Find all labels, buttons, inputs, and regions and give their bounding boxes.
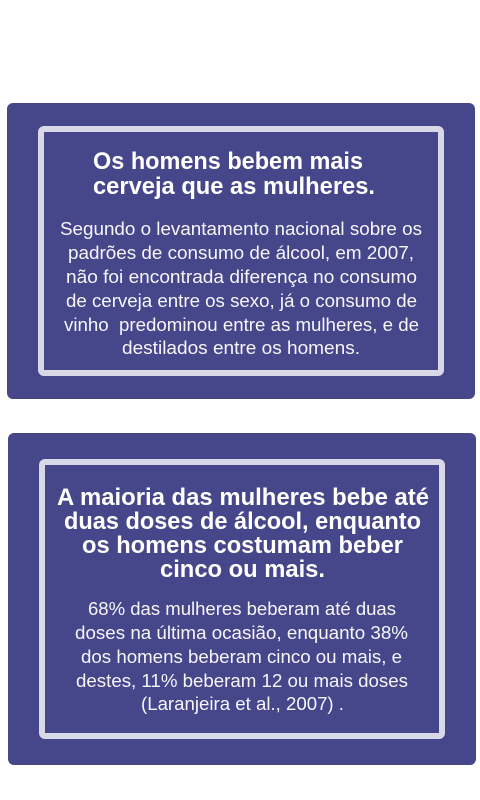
text block: doses statistics	[75, 598, 408, 714]
panel frame	[42, 462, 442, 736]
text block: beer survey	[60, 218, 422, 358]
heading: doses	[57, 484, 429, 583]
text block: beer survey: não foi encontrada diferença no consumo	[66, 266, 417, 287]
panel background	[8, 433, 476, 765]
heading: doses: duas doses de álcool, enquanto	[64, 508, 421, 535]
text block: beer survey: de cerveja entre os sexo, já o consumo de	[66, 290, 417, 311]
heading: beer: cerveja que as mulheres.	[93, 173, 375, 200]
text block: beer survey: padrões de consumo de álcool, em 2007,	[68, 242, 414, 263]
text block: beer survey: vinho predominou entre as mulheres, e de	[64, 314, 419, 335]
panel: number of doses	[8, 433, 476, 765]
heading: doses: cinco ou mais.	[160, 556, 325, 583]
panel: beer consumption	[7, 103, 475, 399]
text block: doses statistics: (Laranjeira et al., 2007) .	[141, 693, 344, 714]
text block: doses statistics: 68% das mulheres beberam até duas	[88, 598, 396, 619]
text block: doses statistics: destes, 11% beberam 12 ou mais doses	[76, 670, 408, 691]
heading: doses: os homens costumam beber	[82, 532, 403, 559]
text block: doses statistics: dos homens beberam cinco ou mais, e	[81, 646, 402, 667]
text block: beer survey: Segundo o levantamento nacional sobre os	[60, 218, 422, 239]
panel frame	[41, 129, 441, 373]
heading: beer: Os homens bebem mais	[93, 148, 363, 175]
heading: doses: A maioria das mulheres bebe até	[57, 484, 429, 511]
heading: beer	[93, 148, 375, 200]
panel background	[7, 103, 475, 399]
text block: beer survey: destilados entre os homens.	[122, 337, 360, 358]
text block: doses statistics: doses na última ocasião, enquanto 38%	[75, 622, 408, 643]
